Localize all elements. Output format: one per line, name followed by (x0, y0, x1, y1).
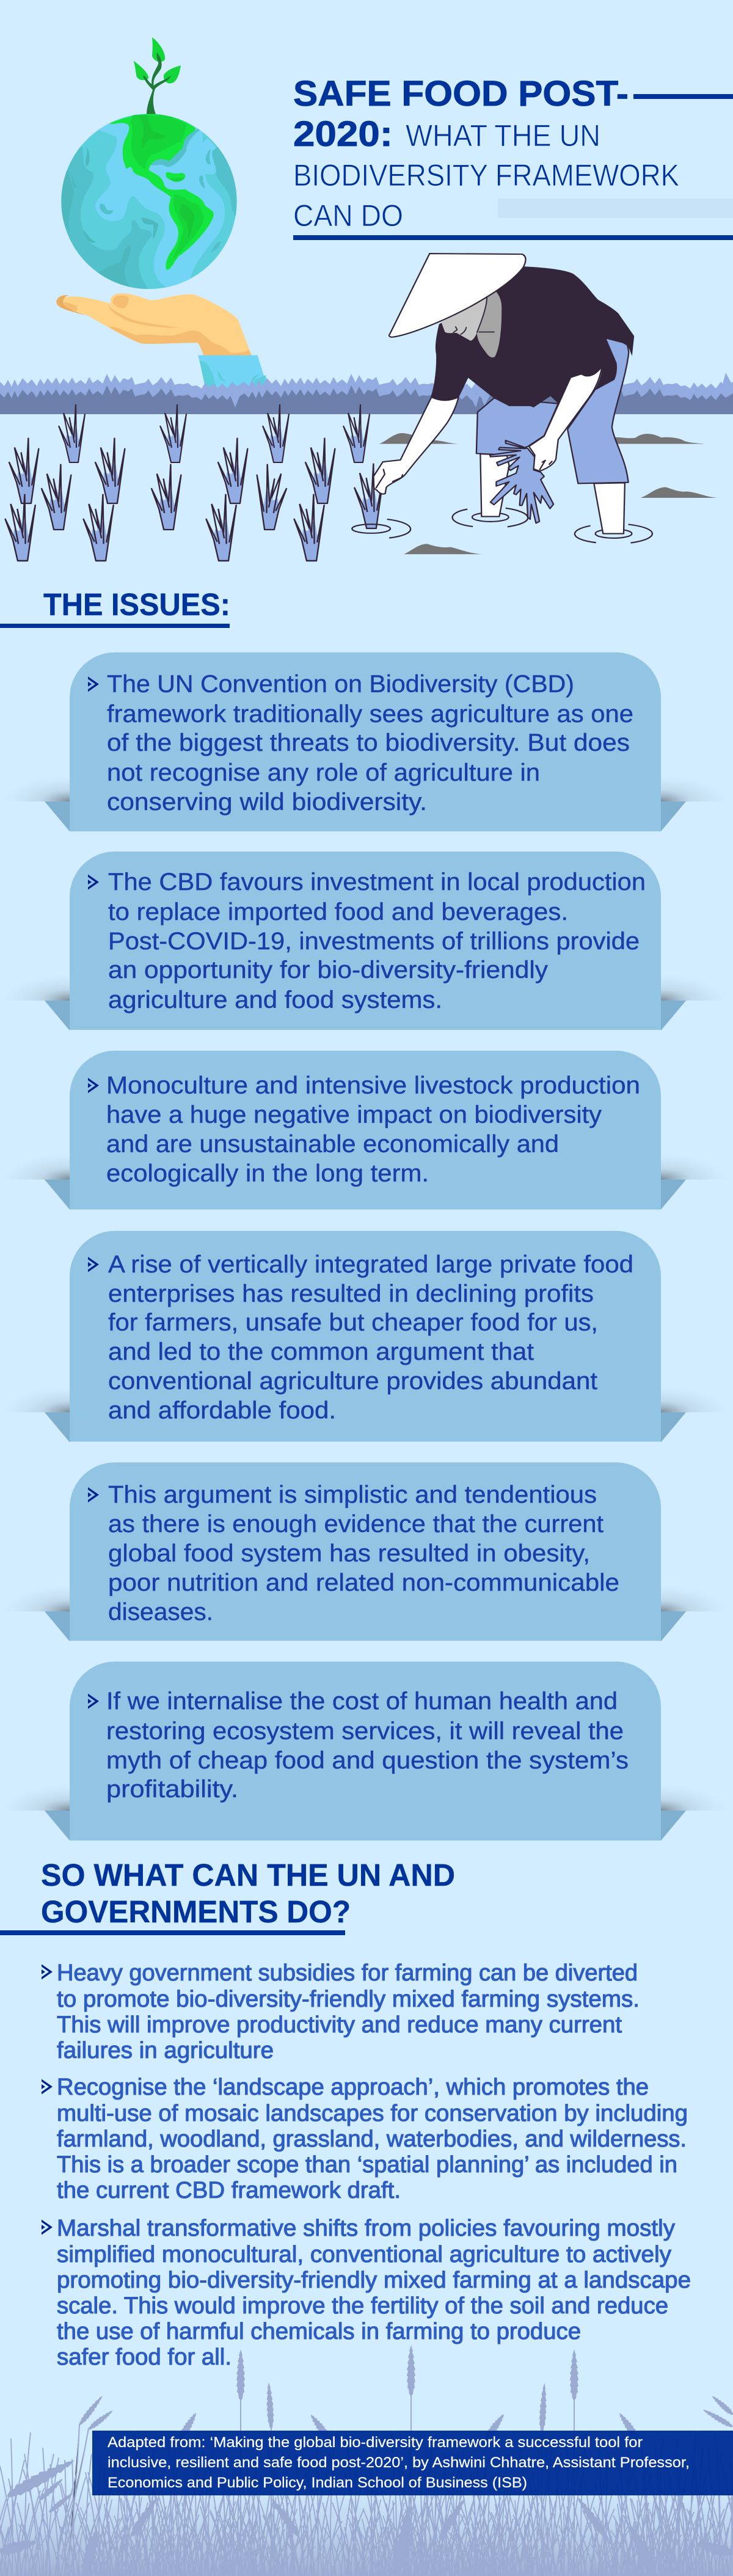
recommendation 3: scale. This would improve the fertility of the soil and reduce (57, 2293, 668, 2319)
recommendation 3 (42, 2216, 691, 2370)
heading: the issues (0, 587, 230, 628)
recommendation 3: promoting bio-diversity-friendly mixed farming at a landscape (57, 2268, 691, 2293)
conical hat (389, 254, 526, 337)
issue 4 text: and affordable food. (108, 1397, 336, 1424)
issue 3 text: have a huge negative impact on biodiversity (106, 1101, 602, 1128)
recommendation 2: the current CBD framework draft. (57, 2178, 401, 2203)
issue 2 text: Post-COVID-19, investments of trillions provide (108, 928, 640, 955)
globe (61, 114, 237, 290)
recommendation 3: safer food for all. (57, 2344, 232, 2370)
issue 2 text: to replace imported food and beverages. (108, 899, 568, 925)
source credit text: Economics and Public Policy, Indian School of Business (ISB) (108, 2475, 527, 2491)
issue 3 text: ecologically in the long term. (106, 1160, 429, 1187)
distant tree line (0, 373, 733, 445)
issue 2 text: The CBD favours investment in local production (108, 869, 646, 896)
issue 6 text (106, 1688, 629, 1803)
recommendation 2: Recognise the ‘landscape approach’, which promotes the (57, 2074, 649, 2100)
issue 1 text: The UN Convention on Biodiversity (CBD) (107, 671, 574, 698)
issue 5 text: This argument is simplistic and tendentious (108, 1481, 597, 1508)
issue 5 text: as there is enough evidence that the current (108, 1511, 604, 1538)
issue 1 text (107, 671, 633, 815)
recommendation 1: This will improve productivity and reduce many current (57, 2012, 622, 2038)
soil mounds (379, 433, 720, 554)
issue 6 text: restoring ecosystem services, it will reveal the (106, 1718, 624, 1745)
sprout (133, 37, 181, 114)
title block (293, 74, 733, 240)
icon: hand cuff (198, 356, 269, 398)
issue 1 text: not recognise any role of agriculture in (107, 759, 540, 786)
heading: so what can the UN and governments do: SO WHAT CAN THE UN AND (41, 1858, 455, 1892)
source credit text: inclusive, resilient and safe food post-2020’, by Ashwini Chhatre, Assistant Professor, (108, 2454, 690, 2471)
issue 2 text: agriculture and food systems. (108, 987, 442, 1013)
rice seedlings (5, 404, 384, 561)
recommendation 2: farmland, woodland, grassland, waterbodies, and wilderness. (57, 2126, 687, 2152)
recommendation 3: simplified monocultural, conventional agriculture to actively (57, 2242, 671, 2268)
issue 2 text (108, 869, 646, 1013)
issue 4 text: and led to the common argument that (108, 1338, 534, 1365)
title: rule after first line (633, 94, 733, 99)
water ripples (352, 508, 652, 543)
north and south america (109, 114, 214, 270)
panel: issue 4 (2, 1231, 728, 1442)
issue 4 text: conventional agriculture provides abundant (108, 1368, 597, 1395)
issue 3 text (106, 1072, 640, 1187)
recommendation 3: the use of harmful chemicals in farming to produce (57, 2319, 581, 2344)
issue 6 text: myth of cheap food and question the system’s (106, 1747, 629, 1774)
recommendation 2 (42, 2074, 688, 2203)
recommendation 1: Heavy government subsidies for farming can be diverted (57, 1960, 638, 1986)
recommendation 1 (42, 1960, 640, 2063)
title: bold line two: 2020: (293, 114, 393, 154)
title: light line four: CAN DO (293, 199, 403, 233)
issue 1 text: framework traditionally sees agriculture as one (107, 701, 633, 728)
issue 4 text (108, 1251, 633, 1424)
recommendation 1: failures in agriculture (57, 2038, 274, 2063)
issue 1 text: of the biggest threats to biodiversity. But does (107, 729, 630, 756)
issue 4 text: for farmers, unsafe but cheaper food for us, (108, 1309, 598, 1336)
heading: the issues: THE ISSUES: (43, 587, 230, 622)
issue 4 text: A rise of vertically integrated large private food (108, 1251, 633, 1278)
issue 1 text: conserving wild biodiversity. (107, 789, 427, 815)
issue 5 text: diseases. (108, 1599, 213, 1626)
issue 5 text: poor nutrition and related non-communicable (108, 1569, 619, 1596)
panel: issue 3 (2, 1051, 728, 1210)
issue 3 text: Monoculture and intensive livestock production (106, 1072, 640, 1099)
heading: so what can the UN and governments do (0, 1858, 455, 1935)
issue 5 text: global food system has resulted in obesity, (108, 1540, 590, 1567)
title: light line two: WHAT THE UN (406, 119, 600, 153)
title: light line three: BIODIVERSITY FRAMEWORK (293, 158, 679, 192)
illustration: farmer planting rice (352, 254, 720, 554)
icon: globe with sprout in a hand (51, 37, 252, 356)
title underline (293, 235, 733, 240)
decorative pale band (498, 199, 733, 218)
neck and face (441, 292, 501, 357)
issue 6 text: If we internalise the cost of human health and (106, 1688, 618, 1715)
seedling bundle (490, 440, 553, 523)
source credit box (92, 2431, 733, 2495)
panel: issue 5 (2, 1462, 728, 1641)
trousers (476, 338, 629, 483)
panel: issue 6 (2, 1662, 728, 1841)
source credit text (108, 2434, 690, 2491)
legs (480, 454, 625, 534)
recommendation 2: This is a broader scope than ‘spatial planning’ as included in (57, 2152, 677, 2178)
recommendation 1: to promote bio-diversity-friendly mixed farming systems. (57, 1987, 640, 2012)
panel: issue 1 (2, 652, 728, 831)
shirt (431, 266, 634, 407)
issue 4 text: enterprises has resulted in declining profits (108, 1280, 594, 1307)
cupped hand (56, 293, 252, 356)
arms (373, 366, 602, 494)
issue 3 text: and are unsustainable economically and (106, 1131, 559, 1158)
recommendation 2: multi-use of mosaic landscapes for conservation by including (57, 2101, 688, 2126)
source credit text: Adapted from: ‘Making the global bio-diversity framework a successful tool for (108, 2434, 643, 2451)
illustration: wheat and grass at page foot (0, 2345, 733, 2576)
issue 5 text (108, 1481, 619, 1626)
issue 6 text: profitability. (106, 1776, 238, 1803)
heading: so what can the UN and governments do: GOVERNMENTS DO? (41, 1894, 351, 1929)
title: bold line one: SAFE FOOD POST- (293, 74, 629, 114)
recommendation 3: Marshal transformative shifts from policies favouring mostly (57, 2216, 675, 2241)
issue 2 text: an opportunity for bio-diversity-friendly (108, 957, 548, 983)
panel: issue 2 (2, 852, 728, 1031)
